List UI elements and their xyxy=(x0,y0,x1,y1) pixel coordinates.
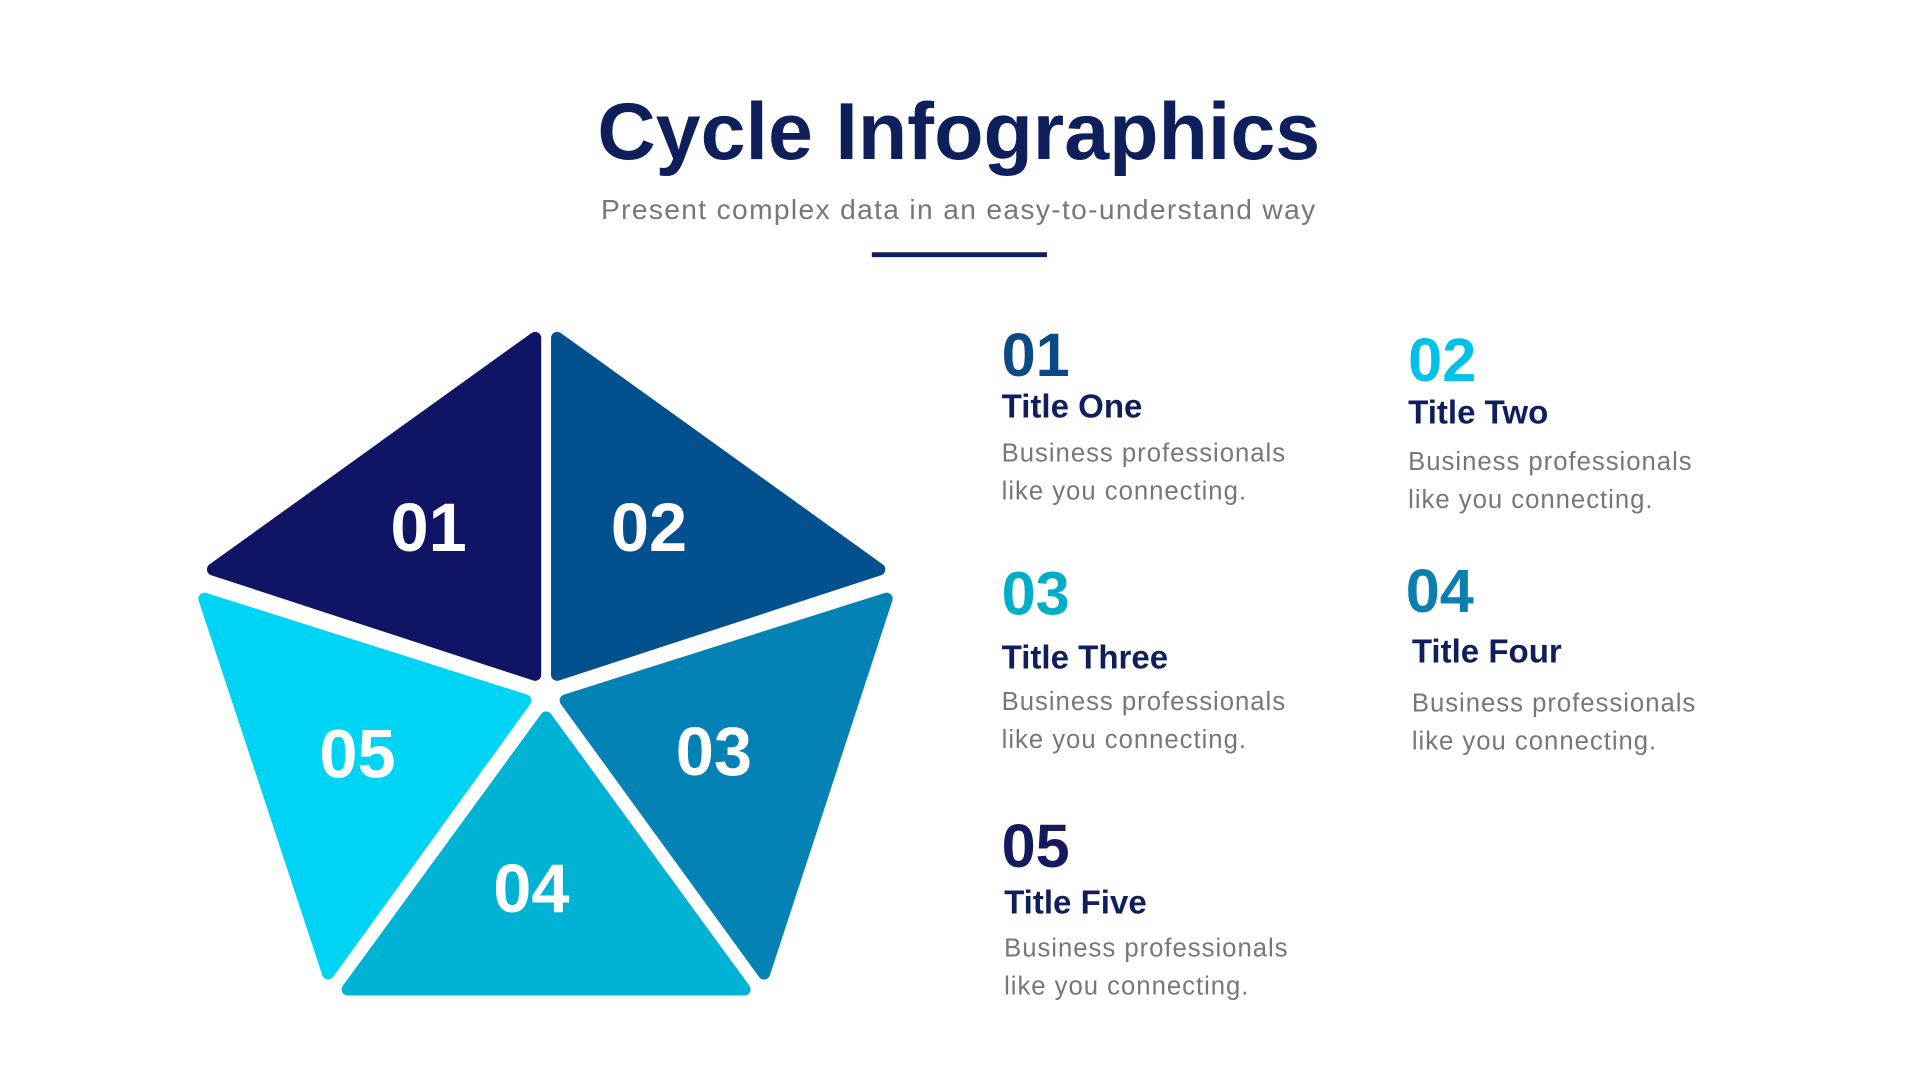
title: Cycle Infographics xyxy=(597,87,1320,177)
item 03: Business professionals xyxy=(1002,688,1286,716)
item 03: 03 xyxy=(1002,560,1070,628)
item 04 xyxy=(1406,557,1696,755)
item 01: Business professionals xyxy=(1002,440,1286,468)
item 02: Title Two xyxy=(1408,395,1548,432)
item 03: like you connecting. xyxy=(1002,726,1247,754)
item 02: 02 xyxy=(1408,326,1476,394)
segment 02 xyxy=(557,338,879,675)
segment 05 xyxy=(204,599,525,973)
segment 02: 02 xyxy=(611,489,687,566)
item 02: Business professionals xyxy=(1408,448,1693,476)
item 02: like you connecting. xyxy=(1408,486,1654,514)
segment 01 xyxy=(213,338,535,675)
item 05: Business professionals xyxy=(1004,934,1289,962)
item 03: Title Three xyxy=(1002,640,1168,677)
segment 03: 03 xyxy=(676,713,752,790)
item 02 xyxy=(1408,326,1693,514)
item 05 xyxy=(1002,812,1289,1000)
item 04: like you connecting. xyxy=(1412,727,1657,755)
item 01: Title One xyxy=(1002,389,1142,426)
item 01 xyxy=(1002,321,1286,506)
segment 01: 01 xyxy=(390,489,467,566)
item 04: 04 xyxy=(1406,557,1474,625)
item 05: 05 xyxy=(1002,812,1070,880)
item 05: Title Five xyxy=(1004,884,1147,921)
item 04: Business professionals xyxy=(1412,689,1696,717)
segment 05: 05 xyxy=(319,716,396,793)
item 03 xyxy=(1002,560,1286,754)
item 04: Title Four xyxy=(1412,633,1562,670)
segment 03 xyxy=(566,599,887,973)
item 01: like you connecting. xyxy=(1002,478,1247,506)
item 01: 01 xyxy=(1002,321,1070,389)
subtitle: Present complex data in an easy-to-understand way xyxy=(601,194,1317,225)
segment 04 xyxy=(348,718,744,989)
pentagon chart xyxy=(204,338,887,989)
segment 04: 04 xyxy=(493,850,570,927)
item 05: like you connecting. xyxy=(1004,972,1249,1000)
